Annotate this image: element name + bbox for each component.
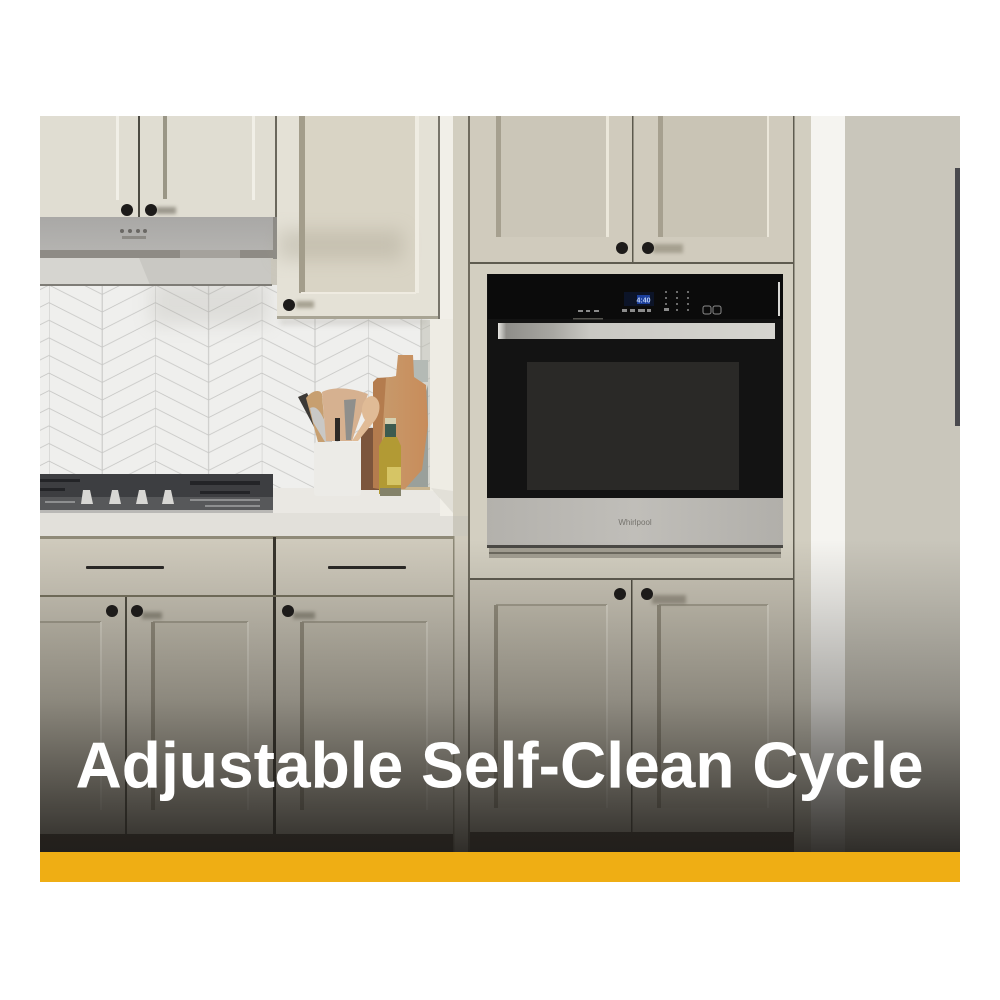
cabinet knobs [616, 242, 654, 254]
wall oven [487, 274, 783, 558]
cutting boards [361, 355, 428, 490]
toe kick [40, 832, 794, 852]
stainless lower panel [487, 498, 783, 545]
countertop [40, 487, 453, 539]
clock display: 4:40 [636, 298, 651, 304]
lower oven column doors [470, 578, 794, 832]
wall base [40, 116, 960, 852]
lower left cabinets [40, 597, 453, 834]
cabinet knobs [106, 605, 294, 617]
cabinet knobs [614, 588, 653, 600]
cooktop knobs [81, 490, 174, 504]
right pilasters and wall [793, 116, 960, 852]
range hood [40, 217, 277, 286]
cabinet knob [283, 299, 295, 311]
keypad dots [578, 291, 689, 312]
yellow bar [40, 852, 960, 882]
wall art edge [955, 168, 960, 426]
oven column upper doors [470, 116, 794, 264]
brand mark: Whirlpool [618, 518, 652, 527]
utensils [298, 388, 380, 442]
oil bottle [379, 418, 401, 496]
hood buttons [120, 229, 147, 239]
upper centre cabinet [277, 116, 440, 319]
oven window [527, 362, 739, 490]
door handle [498, 323, 775, 339]
cabinet knobs [121, 204, 157, 216]
title: Adjustable Self-Clean Cycle [76, 728, 924, 802]
kitchen photo [40, 116, 960, 852]
side panel between cabinets [430, 116, 470, 852]
backsplash [40, 280, 432, 491]
utensils and board [298, 355, 428, 496]
drawers [40, 537, 453, 834]
oven surround [470, 264, 794, 580]
crock [314, 442, 361, 496]
control panel [488, 274, 783, 320]
clock display [624, 292, 654, 306]
drawer handles [86, 566, 406, 569]
upper left cabinets [40, 116, 277, 219]
knob shadows [142, 612, 315, 619]
gas cooktop [40, 474, 273, 513]
bottom vent [487, 545, 783, 558]
dark gradient overlay [40, 540, 960, 852]
